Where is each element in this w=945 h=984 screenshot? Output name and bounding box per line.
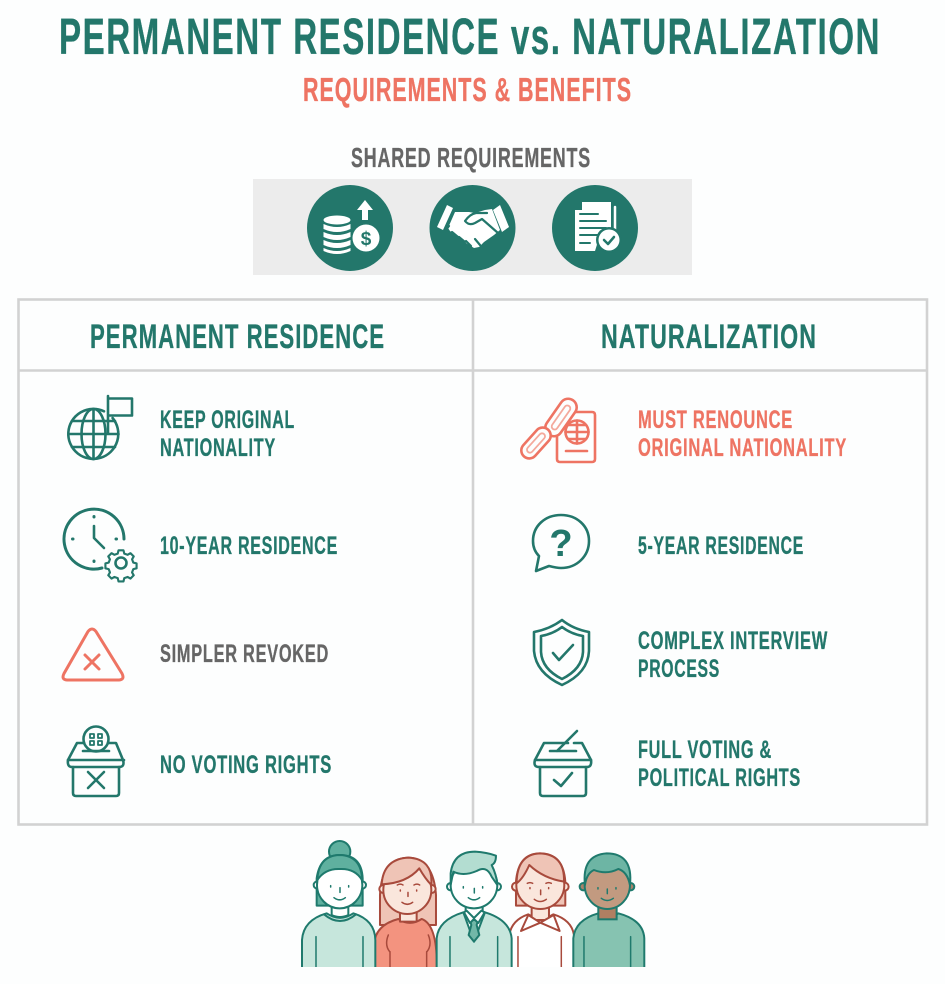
text: complex interview process: COMPLEX INTERVIEW <box>638 627 828 655</box>
column heading: naturalization: NATURALIZATION <box>601 318 817 356</box>
column heading: permanent residence: PERMANENT RESIDENCE <box>90 318 385 356</box>
text: full voting and political rights: FULL VOTING & <box>638 736 772 764</box>
icon: broken chain and passport <box>518 395 595 462</box>
panel: shared requirements icons <box>253 179 692 275</box>
icon: document with check <box>552 185 638 271</box>
text: must renounce original nationality <box>638 406 847 462</box>
text: keep original nationality <box>160 406 295 462</box>
person: woman with hair bun <box>302 841 375 973</box>
panel: naturalization items <box>518 395 847 796</box>
panel: permanent residence items <box>63 396 338 796</box>
icon: handshake <box>430 185 516 271</box>
text: no voting rights: NO VOTING RIGHTS <box>160 751 332 779</box>
heading: shared requirements: SHARED REQUIREMENTS <box>351 142 591 173</box>
icon: speech bubble with question mark <box>533 515 589 571</box>
text: complex interview process: PROCESS <box>638 655 720 683</box>
text: full voting and political rights: POLITICAL RIGHTS <box>638 764 801 792</box>
person: woman with long hair, coral top <box>374 858 437 973</box>
subtitle: REQUIREMENTS & BENEFITS <box>303 71 632 108</box>
text: 5-year residence: 5-YEAR RESIDENCE <box>638 532 804 560</box>
text: 10-year residence: 10-YEAR RESIDENCE <box>160 532 338 560</box>
icon: speech bubble with question mark: ? <box>549 523 573 565</box>
text: full voting and political rights <box>638 736 801 792</box>
icon: globe with flag <box>68 396 132 459</box>
icon: ballot box with check <box>534 731 591 796</box>
person: man with tie and jacket <box>437 852 512 973</box>
icon: clock with gear <box>64 509 137 581</box>
text: must renounce original nationality: MUST RENOUNCE <box>638 406 793 434</box>
icon: warning triangle with x <box>63 629 123 680</box>
icon: ballot box with x <box>68 726 124 796</box>
comparison table frame <box>18 300 927 824</box>
person: woman with collared shirt <box>509 853 574 973</box>
icon: shield with check <box>534 620 589 685</box>
person: man with dark skin, green top <box>573 853 644 973</box>
text: keep original nationality: KEEP ORIGINAL <box>160 406 295 434</box>
text: keep original nationality: NATIONALITY <box>160 434 276 462</box>
illustration: group of five people <box>302 841 644 973</box>
icon: coins and money growth <box>307 185 393 271</box>
text: simpler revoked: SIMPLER REVOKED <box>160 640 329 668</box>
icon: coins and money growth: $ <box>361 229 372 250</box>
text: complex interview process <box>638 627 828 683</box>
